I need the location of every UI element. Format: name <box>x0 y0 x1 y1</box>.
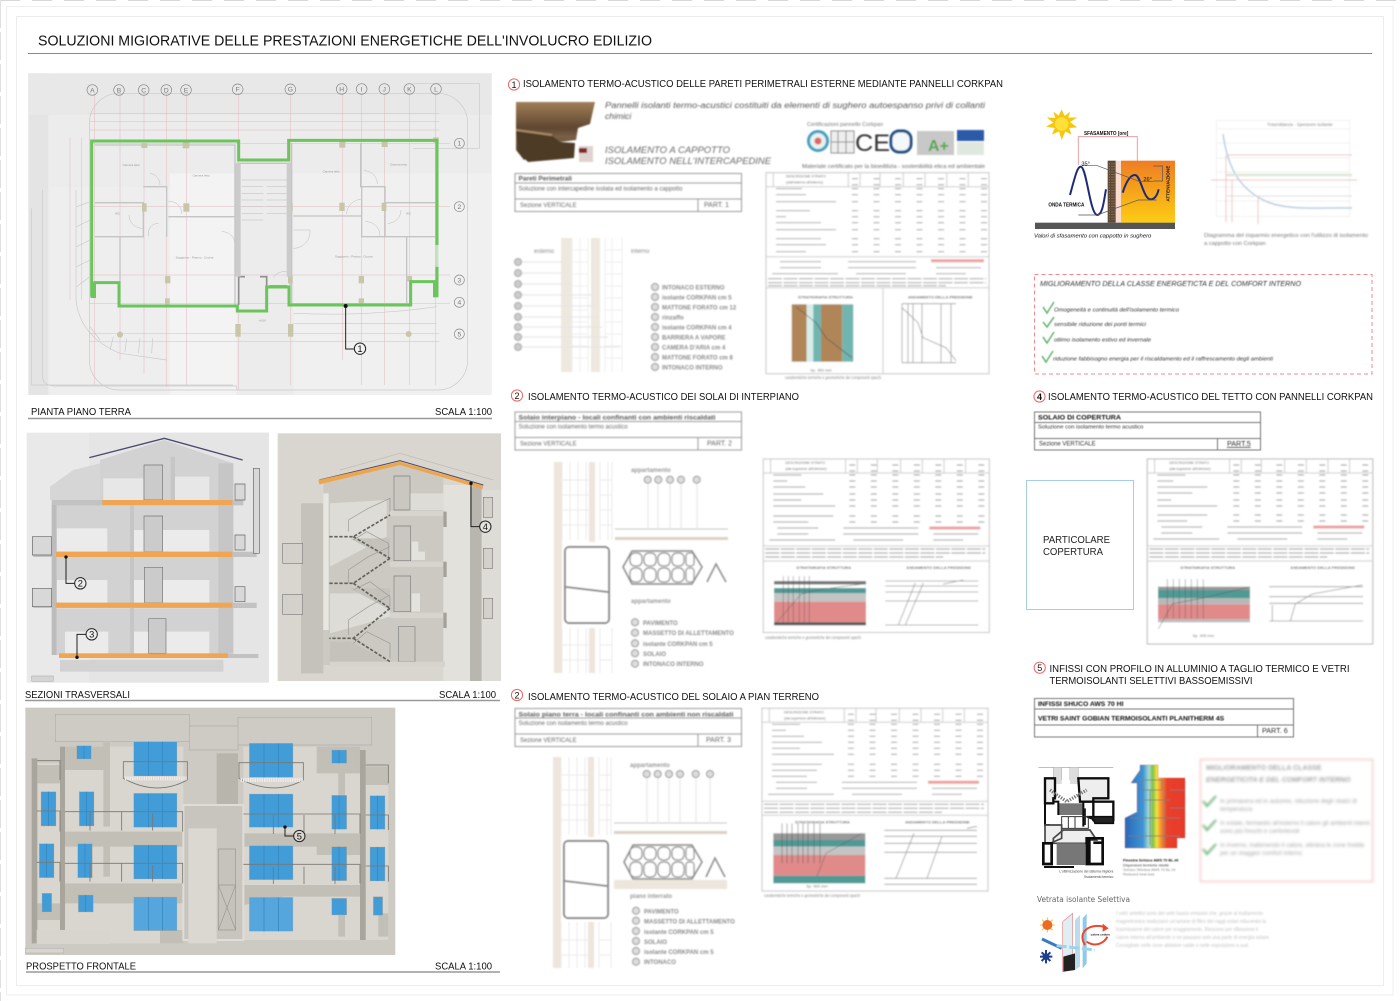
heading 2 interpiano: 2 <box>514 391 520 401</box>
table and charts: interpiano <box>763 459 989 632</box>
heading 5: TERMOISOLANTI SELETTIVI BASSOEMISSIVI <box>1050 676 1252 687</box>
table and charts: roof: ANDAMENTO DELLA PRESSIONE <box>1290 565 1355 570</box>
callout: comfort improvement: riduzione fabbisogno energia per il riscaldamento ed il raffrescamento degli ambienti <box>1053 356 1274 362</box>
caption: sections: SEZIONI TRASVERSALI <box>25 690 130 701</box>
text block: selective glazing description: Consigliato nelle zone abitative calde o nelle esposizioni a sud. <box>1116 943 1249 949</box>
caption: floor plan <box>28 407 492 418</box>
table and charts: wall: (dall'esterno all'interno) <box>786 181 823 185</box>
diagram: thermal wave: 26° <box>1143 177 1152 183</box>
table and charts: wall: Sp. 350 mm <box>810 368 832 373</box>
panel: cork product intro: ISOLAMENTO A CAPPOTTO <box>605 145 730 155</box>
diagram: window thermal map: Schüco Window AWS 70 BL.HI <box>1123 868 1175 872</box>
callout: class improvement blurred: temperatura <box>1220 807 1253 813</box>
table and charts: roof: (dal superiore all'inferiore) <box>1169 467 1211 471</box>
heading 5: INFISSI CON PROFILO IN ALLUMINIO A TAGLIO TERMICO E VETRI <box>1050 664 1350 675</box>
floor section drawing: PAVIMENTO <box>643 621 678 627</box>
title box: solaio piano terra: Solaio piano terra - locali confinanti con ambienti non riscaldati <box>518 712 734 718</box>
placeholder: particolare copertura: COPERTURA <box>1043 547 1103 558</box>
caption: front elevation: PROSPETTO FRONTALE <box>26 962 136 972</box>
ground floor section drawing: SOLAIO <box>644 940 667 946</box>
floor section drawing: SOLAIO <box>643 652 666 658</box>
diagram: window thermal map: Dispersioni termiche ridotte <box>1123 864 1169 868</box>
wall section drawing: isolante CORKPAN cm 4 <box>662 326 732 332</box>
panel: floor plan: Soggiorno - Pranzo - Cucina <box>335 254 373 258</box>
panel: cork product intro: Pannelli isolanti termo-acustici costituiti da elementi di sughero autoespanso privi di collanti <box>605 100 986 110</box>
subheading: vetrata isolante: Vetrata isolante Selettiva <box>1037 894 1130 904</box>
panel: floor plan: +0.00 <box>258 319 266 323</box>
callout: class improvement blurred: In estate, fermando all'esterno il calore gli ambienti interni <box>1220 821 1370 827</box>
callout: comfort improvement: sensibile riduzione dei ponti termici <box>1054 322 1147 328</box>
icon: selective glazing: calore ceduto <box>1091 933 1110 937</box>
diagram: thermal wave: ONDA TERMICA <box>1048 203 1084 209</box>
title box: solaio piano terra: PART. 3 <box>706 737 731 744</box>
heading 3 pian terreno: 2 <box>514 690 520 700</box>
panel: floor plan: L <box>434 86 438 93</box>
floor section drawing <box>554 462 734 673</box>
title box: pareti perimetrali: Pareti Perimetrali <box>518 176 572 182</box>
panel: floor plan: 1 <box>357 344 363 354</box>
table and charts: roof <box>1147 459 1373 644</box>
caption: floor plan: SCALA 1:100 <box>435 407 492 418</box>
panel: floor plan: 3 <box>457 277 461 284</box>
ground floor section drawing: PAVIMENTO <box>644 910 679 916</box>
text block: selective glazing description: trasmissione del calore per irraggiamento. Riescono per riflessione il <box>1116 927 1258 933</box>
text block: selective glazing description: magnetronico realizzano un'azione di filtro dei raggi solari riducendo la <box>1116 919 1266 925</box>
panel: front elevation: 5 <box>297 831 302 841</box>
diagram: window thermal map: Reduced heat loss <box>1123 872 1155 876</box>
heading 5: 5 <box>1037 663 1042 673</box>
wall section drawing: esterno <box>534 249 555 255</box>
chart: energy saving curve: Trasmittanza - Spessore isolante <box>1267 122 1333 127</box>
caption: sections: SCALA 1:100 <box>439 690 496 701</box>
panel: floor plan: I <box>361 86 363 93</box>
panel: floor plan: Soggiorno - Pranzo - Cucina <box>176 255 214 259</box>
panel: floor plan: H <box>339 86 344 93</box>
diagram: window thermal map <box>1123 765 1185 876</box>
chart: energy saving curve: a cappotto con Corkpan <box>1204 241 1266 247</box>
table and charts: roof: STRATIGRAFIA STRUTTURA <box>1180 565 1235 570</box>
title box: pareti perimetrali: Sezione VERTICALE <box>520 203 577 209</box>
table note: wall: caratteristiche termiche e geometriche dei componenti opachi <box>785 375 881 380</box>
panel: floor plan: D <box>164 87 169 94</box>
panel: floor plan: A <box>90 87 95 94</box>
ground floor section drawing: INTONACO <box>644 960 676 966</box>
wall section drawing: interno <box>631 249 650 255</box>
callout: comfort improvement: Omogeneità e continuità dell'isolamento termico <box>1054 308 1179 314</box>
callout: class improvement blurred <box>1200 760 1372 882</box>
table and charts: wall: ANDAMENTO DELLA PRESSIONE <box>908 295 973 300</box>
ground floor section drawing: isolante CORKPAN cm 5 <box>644 950 714 956</box>
panel: floor plan: WC <box>406 212 412 216</box>
heading 4: ISOLAMENTO TERMO-ACUSTICO DEL TETTO CON PANNELLI CORKPAN <box>1048 392 1373 403</box>
panel: cork product intro: ISOLAMENTO NELL'INTERCAPEDINE <box>605 156 772 166</box>
table and charts: interpiano: DESCRIZIONE STRATO <box>785 461 825 465</box>
caption: floor plan: PIANTA PIANO TERRA <box>31 407 131 418</box>
panel: floor plan: 2 <box>457 204 461 211</box>
diagram: thermal wave: 35° <box>1081 161 1090 167</box>
title box: solaio piano terra <box>515 708 742 746</box>
heading 1: 1 <box>511 80 517 90</box>
callout: comfort improvement: MIGLIORAMENTO DELLA CLASSE ENERGETICTA E DEL COMFORT INTERNO <box>1040 279 1301 288</box>
table and charts: pian terreno: DESCRIZIONE STRATO <box>784 710 824 714</box>
text block: selective glazing description <box>1116 911 1270 949</box>
heading 2 interpiano: ISOLAMENTO TERMO-ACUSTICO DEI SOLAI DI INTERPIANO <box>528 392 799 403</box>
table and charts: pian terreno: Sp. 500 mm <box>806 883 828 888</box>
title box: solaio piano terra: Sezione VERTICALE <box>520 738 577 744</box>
chart: energy saving curve <box>1204 120 1368 247</box>
callout: class improvement blurred: In inverno, trattenendo il calore, elimina le zone fredde <box>1220 843 1365 849</box>
ground floor section drawing: isolante CORKPAN cm 5 <box>644 930 714 936</box>
panel: cross section left: 3 <box>89 630 94 640</box>
callout: class improvement blurred: ENERGETICITA E DEL COMFORT INTERNO <box>1206 777 1351 784</box>
wall section drawing: INTONACO ESTERNO <box>662 286 725 292</box>
floor section drawing: appartamento <box>631 468 671 474</box>
title box: solaio di copertura: SOLAIO DI COPERTURA <box>1038 414 1121 422</box>
panel: cross section left: 2 <box>78 579 83 589</box>
floor section drawing: appartamento <box>631 599 671 605</box>
title box: infissi: INFISSI SHUCO AWS 70 HI <box>1038 701 1124 708</box>
wall section drawing: MATTONE FORATO cm 12 <box>662 306 737 312</box>
panel: floor plan: J <box>383 86 386 93</box>
wall section drawing: isolante CORKPAN cm 5 <box>662 296 732 302</box>
callout: comfort improvement: ottimo isolamento estivo ed invernale <box>1054 338 1151 344</box>
wall section drawing: CAMERA D'ARIA cm 4 <box>662 346 726 352</box>
text block: selective glazing description: I vetri selettivi sono dei vetri basso emissivi che, grazie al trattamento <box>1116 911 1263 917</box>
panel: cross section left <box>27 433 269 683</box>
table and charts: wall: DESCRIZIONE STRATO <box>786 175 826 179</box>
panel: cross section right: 4 <box>483 522 488 532</box>
heading 1: ISOLAMENTO TERMO-ACUSTICO DELLE PARETI PERIMETRALI ESTERNE MEDIANTE PANNELLI CORKPAN <box>523 79 1003 90</box>
diagram: thermal wave: Valori di sfasamento con cappotto in sughero <box>1034 233 1151 239</box>
chart: energy saving curve: Diagramma del risparmio energetico con l'utilizzo di isolamento <box>1204 233 1368 239</box>
placeholder: particolare copertura <box>1026 480 1134 610</box>
table and charts: interpiano: (dal superiore all'inferiore) <box>785 467 827 471</box>
panel: cork product intro: chimici <box>605 111 632 121</box>
table and charts: wall <box>766 173 989 374</box>
title: SOLUZIONI MIGIORATIVE DELLE PRESTAZIONI ENERGETICHE DELL'INVOLUCRO EDILIZIO <box>38 34 652 50</box>
ground floor section drawing: MASSETTO DI ALLETTAMENTO <box>644 920 735 926</box>
title box: solaio interpiano: Soluzione con isolamento termo acustico <box>518 424 628 430</box>
diagram: thermal wave: ATTENUAZIONE <box>1166 165 1172 202</box>
caption: sections <box>25 690 500 701</box>
ground floor section drawing <box>553 757 735 968</box>
panel: floor plan: 5 <box>457 331 461 338</box>
placeholder: particolare copertura: PARTICOLARE <box>1043 535 1110 546</box>
title box: solaio interpiano: Sezione VERTICALE <box>520 442 577 448</box>
caption: front elevation: SCALA 1:100 <box>435 962 492 972</box>
heading 4: 4 <box>1037 392 1042 402</box>
panel: floor plan: K <box>407 86 412 93</box>
panel: floor plan: B <box>117 87 122 94</box>
table and charts: pian terreno: ANDAMENTO DELLA PRESSIONE <box>905 819 970 824</box>
panel: floor plan: F <box>236 87 240 94</box>
table and charts: interpiano: ANDAMENTO DELLA PRESSIONE <box>906 565 971 570</box>
table and charts: roof: Sp. 400 mm <box>1193 633 1215 638</box>
caption: front elevation <box>26 962 500 972</box>
floor section drawing: isolante CORKPAN cm 5 <box>643 642 713 648</box>
title box: solaio di copertura: Soluzione con isolamento termo acustico <box>1038 424 1143 430</box>
table and charts: interpiano: STRATIGRAFIA STRUTTURA <box>796 565 851 570</box>
icon: selective glazing <box>1040 913 1110 972</box>
ground floor section drawing: piano interrato <box>630 894 672 900</box>
title box: infissi <box>1034 698 1294 737</box>
title box: infissi: VETRI SAINT GOBIAN TERMOISOLANTI PLANITHERM 4S <box>1038 716 1225 722</box>
diagram: thermal wave: SFASAMENTO [ore] <box>1084 131 1129 137</box>
floor section drawing: MASSETTO DI ALLETTAMENTO <box>643 631 734 637</box>
callout: comfort improvement <box>1034 274 1372 374</box>
table and charts: pian terreno: STRATIGRAFIA STRUTTURA <box>795 819 850 824</box>
wall section drawing: INTONACO INTERNO <box>662 366 723 372</box>
wall section drawing: MATTONE FORATO cm 8 <box>662 356 734 362</box>
panel: floor plan: G <box>288 87 293 94</box>
table and charts: pian terreno: (dal superiore all'inferiore) <box>784 716 825 720</box>
title box: solaio interpiano: Solaio interpiano - locali confinanti con ambienti riscaldati <box>518 414 716 422</box>
title box: pareti perimetrali: Soluzione con intercapedine isolata ed isolamento a cappotto <box>518 186 683 192</box>
table and charts: wall: STRATIGRAFIA STRUTTURA <box>798 295 853 300</box>
floor section drawing: INTONACO INTERNO <box>643 662 704 668</box>
panel: floor plan: 4 <box>457 300 461 307</box>
icon row: certifications: Certificazioni pannello Corkpan <box>807 122 883 128</box>
heading 5 <box>1034 662 1350 687</box>
title box: infissi: PART. 6 <box>1262 726 1288 735</box>
diagram: window profile section <box>1038 767 1113 879</box>
title box: solaio di copertura: PART.5 <box>1227 439 1251 448</box>
title box: solaio di copertura: Sezione VERTICALE <box>1039 442 1096 448</box>
heading 3 pian terreno: ISOLAMENTO TERMO-ACUSTICO DEL SOLAIO A PIAN TERRENO <box>528 692 819 703</box>
wall section drawing: rinzaffo <box>662 316 684 322</box>
panel: floor plan: Camera letto <box>193 174 210 178</box>
diagram: window profile section: l'isolamento termico <box>1084 875 1113 879</box>
panel: floor plan: Camera letto <box>390 162 407 166</box>
callout: class improvement blurred: per un maggior comfort interno <box>1220 851 1303 857</box>
icon row: certifications: CE <box>855 130 890 157</box>
title box: solaio interpiano: PART. 2 <box>707 440 732 448</box>
panel: floor plan: Camera letto <box>123 163 140 167</box>
title box: pareti perimetrali: PART. 1 <box>704 202 729 209</box>
table and charts: roof: DESCRIZIONE STRATO <box>1169 461 1209 465</box>
table and charts: pian terreno <box>762 708 988 891</box>
panel: front elevation <box>25 708 395 955</box>
table note: pian terreno: caratteristiche termiche e geometriche dei componenti opachi <box>764 893 860 898</box>
callout: class improvement blurred: MIGLIORAMENTO DELLA CLASSE <box>1206 765 1322 772</box>
title box: solaio di copertura <box>1034 412 1260 450</box>
panel: floor plan <box>28 73 492 395</box>
diagram: window profile section: L'ottimizzazione del sistema migliora <box>1059 869 1113 873</box>
panel: floor plan: Camera letto <box>323 170 340 174</box>
ground floor section drawing: appartamento <box>630 763 670 769</box>
panel: cork product intro <box>516 100 986 166</box>
text block: selective glazing description: calore interno all'ambiente e ne passano solo una parte di energia solare. <box>1116 935 1270 941</box>
panel: floor plan: C <box>141 87 146 94</box>
title box: solaio piano terra: Soluzione con isolamento termo acustico <box>518 721 628 727</box>
diagram: window thermal map: Finestra Schüco AWS 70 BL.HI <box>1123 858 1178 862</box>
icon row: certifications: A+ <box>928 138 949 155</box>
table note: interpiano: caratteristiche termiche e geometriche dei componenti opachi <box>765 635 861 640</box>
title box: pareti perimetrali <box>515 174 742 212</box>
callout: class improvement blurred: sono più freschi e confortevoli <box>1220 829 1299 835</box>
diagram: thermal wave <box>1034 109 1175 239</box>
wall section drawing <box>514 238 737 372</box>
panel: cross section right <box>278 433 501 681</box>
panel: floor plan: 1 <box>457 141 461 148</box>
title box: solaio interpiano <box>515 412 742 450</box>
panel: floor plan: WC <box>115 212 121 216</box>
callout: class improvement blurred: In primavera ed in autunno, riduzione degli sbalzi di <box>1220 799 1357 805</box>
icon row: certifications <box>802 122 985 170</box>
panel: floor plan: E <box>184 87 189 94</box>
wall section drawing: BARRIERA A VAPORE <box>662 336 726 342</box>
icon row: certifications: Materiale certificato per la bioedilizia - sostenibilità etica ed ambientale <box>802 164 985 170</box>
